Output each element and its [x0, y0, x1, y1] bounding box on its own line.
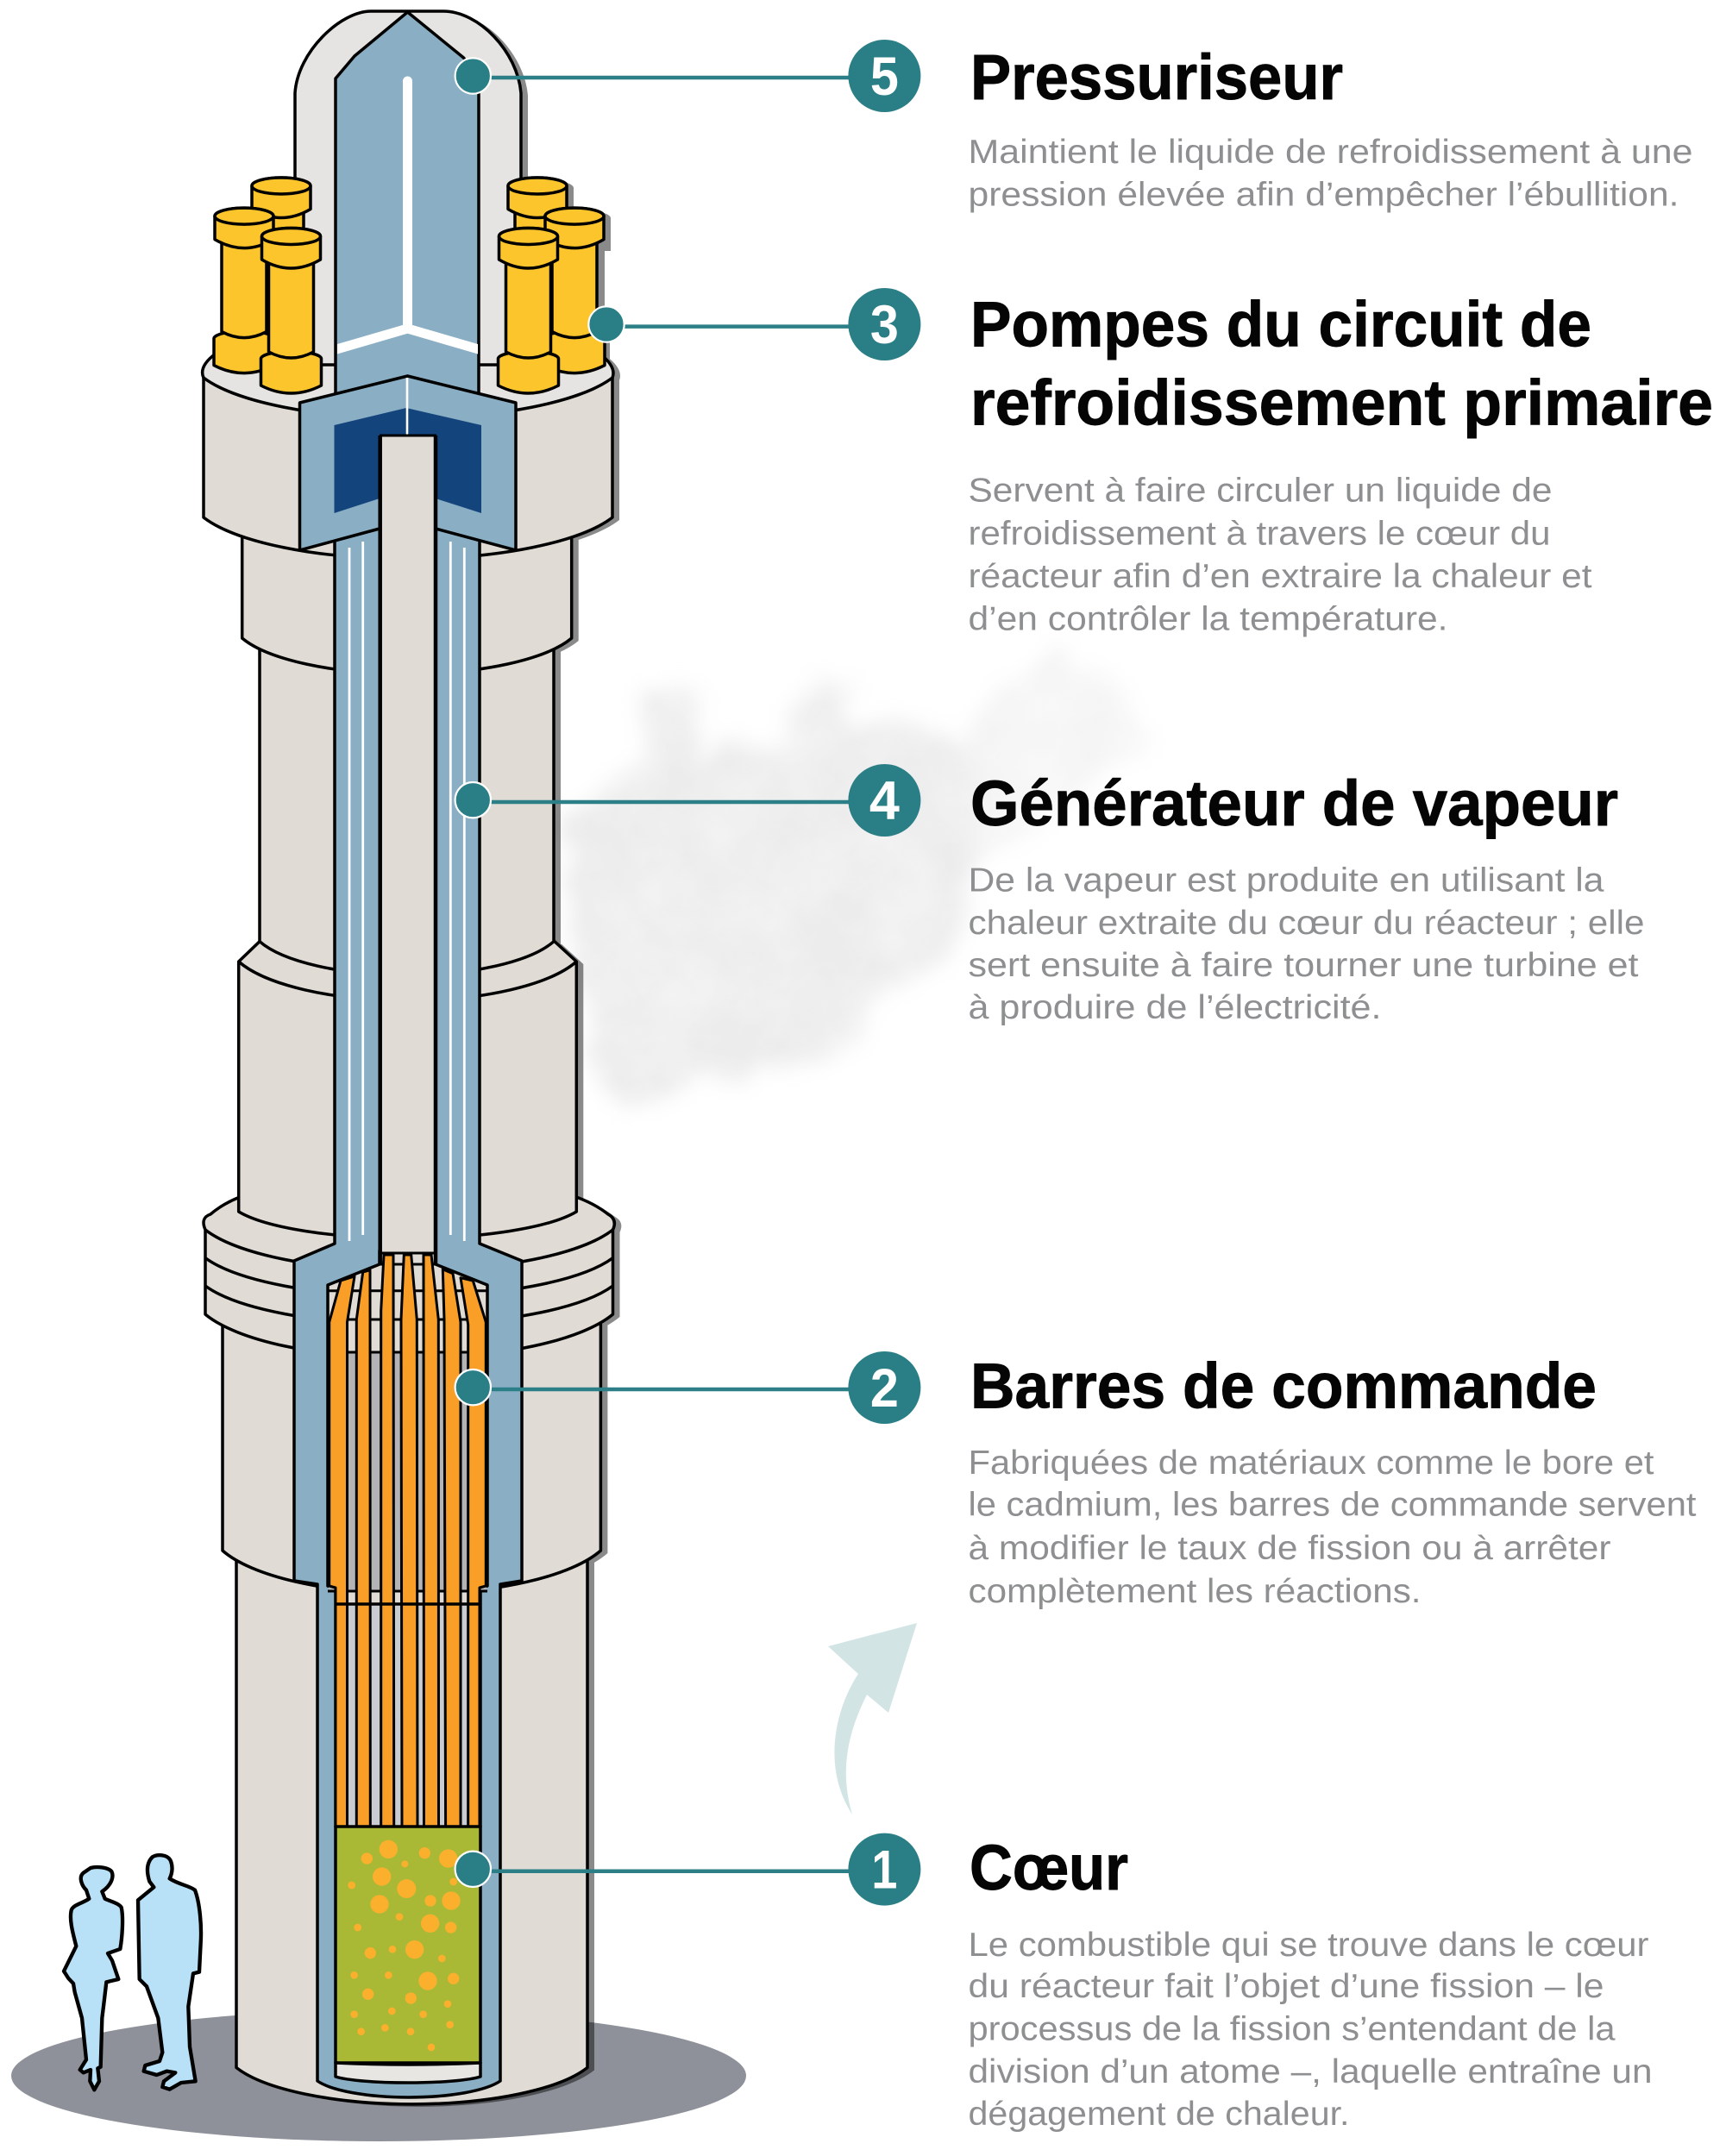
- steam cloud: [565, 647, 1139, 1117]
- pump: right: [544, 208, 605, 373]
- chamber divider: [336, 1602, 480, 1606]
- description: coeur: [968, 1927, 1653, 2133]
- description: generateur: sert ensuite à faire tourner une turbine et: [968, 947, 1639, 984]
- description: coeur: Le combustible qui se trouve dans le cœur: [968, 1927, 1649, 1964]
- description: coeur: processus de la fission s’entendant de la: [968, 2011, 1616, 2047]
- number badge 2: [848, 1351, 920, 1424]
- heading: coeur: Cœur: [970, 1832, 1128, 1903]
- description: barres: complètement les réactions.: [968, 1573, 1422, 1610]
- description: pressuriseur: Maintient le liquide de refroidissement à une: [968, 134, 1692, 171]
- number badge 5: 5: [870, 47, 899, 107]
- leader line 3: [621, 324, 850, 329]
- description: barres: Fabriquées de matériaux comme le bore et: [968, 1445, 1654, 1482]
- fuel core: [336, 1827, 480, 2083]
- silhouette: woman: [64, 1867, 122, 2090]
- number badge 4: 4: [869, 771, 900, 831]
- description: barres: à modifier le taux de fission ou à arrêter: [968, 1530, 1611, 1567]
- steam generator shaft: [260, 630, 554, 975]
- ground shadow ellipse: [11, 2010, 746, 2141]
- description: pressuriseur: pression élevée afin d’empêcher l’ébullition.: [968, 176, 1679, 214]
- figures: two people for scale: [64, 1855, 201, 2090]
- marker dot 5: [455, 58, 491, 94]
- tower base cylinder: [236, 1552, 587, 2104]
- reactor tower: [203, 11, 614, 2104]
- number badge 1: 1: [871, 1840, 897, 1901]
- description: pressuriseur: [968, 134, 1692, 214]
- panel: pompes: [848, 288, 1713, 638]
- lower interstitial fill: [336, 1605, 480, 1827]
- curved arrow: [828, 1623, 917, 1814]
- steam tube lines: [349, 542, 464, 1241]
- heading: pressuriseur: Pressuriseur: [970, 41, 1343, 113]
- panel: barres de commande: [848, 1350, 1697, 1610]
- central column: [380, 436, 436, 1264]
- number badge 4: [848, 764, 920, 837]
- steam generator lower section: [239, 942, 576, 1238]
- cutaway head: [300, 376, 516, 550]
- heading: pompes: [970, 288, 1713, 438]
- pump: back right: [507, 178, 568, 343]
- leader line 2: [487, 1388, 850, 1391]
- leader line 1: [487, 1869, 850, 1873]
- leader line 5: [487, 76, 850, 79]
- description: coeur: du réacteur fait l’objet d’une fission – le: [968, 1968, 1604, 2005]
- banded flange: [204, 1197, 614, 1358]
- tower drop shadow: [210, 14, 621, 2107]
- control rod chamber: [328, 1250, 487, 1827]
- heading: pompes: Pompes du circuit de: [970, 288, 1591, 360]
- number badge 3: 3: [870, 295, 899, 355]
- coolant wall section: [294, 526, 522, 2097]
- description: generateur: De la vapeur est produite en utilisant la: [968, 862, 1604, 899]
- description: pompes: refroidissement à travers le cœur du: [968, 516, 1551, 553]
- pump: left: [214, 208, 274, 373]
- fission bubbles: [348, 1840, 461, 2051]
- pump: front right: [499, 228, 559, 393]
- grey interstitial fill: [329, 1352, 486, 1591]
- pump: back left: [251, 178, 311, 343]
- number badge 3: [848, 288, 920, 360]
- panel: generateur: [848, 764, 1644, 1026]
- description: coeur: division d’un atome –, laquelle entraîne un: [968, 2053, 1653, 2090]
- panel: pressuriseur: [848, 40, 1692, 214]
- number badge 1: [848, 1833, 920, 1906]
- heading: pompes: refroidissement primaire: [970, 367, 1713, 438]
- description: generateur: à produire de l’électricité.: [968, 989, 1382, 1026]
- heading: generateur: Générateur de vapeur: [970, 768, 1618, 839]
- description: generateur: [968, 862, 1644, 1026]
- leader line 4: [487, 800, 850, 804]
- description: coeur: dégagement de chaleur.: [968, 2096, 1349, 2133]
- description: barres: [968, 1445, 1697, 1610]
- description: generateur: chaleur extraite du cœur du réacteur ; elle: [968, 905, 1644, 942]
- heading: barres: Barres de commande: [970, 1350, 1597, 1421]
- number badge 5: [848, 40, 920, 112]
- pump: front left: [260, 228, 321, 393]
- description: barres: le cadmium, les barres de commande servent: [968, 1487, 1697, 1523]
- marker dot 4: [455, 782, 491, 818]
- chamber cross lines: [328, 1264, 487, 1591]
- top flange: [204, 378, 612, 559]
- lower vessel cylinder: [223, 1319, 600, 1594]
- panel: coeur: [848, 1832, 1653, 2133]
- marker dot 3: [588, 306, 624, 342]
- description: pompes: [968, 473, 1592, 638]
- number badge 2: 2: [870, 1358, 899, 1419]
- description: pompes: d’en contrôler la température.: [968, 600, 1447, 638]
- description: pompes: réacteur afin d’en extraire la chaleur et: [968, 558, 1592, 595]
- silhouette: man: [138, 1855, 201, 2090]
- upper collar: [242, 517, 572, 674]
- platform top: [203, 354, 613, 418]
- pressuriser dome: [295, 11, 521, 397]
- control rods: [330, 1255, 486, 1827]
- marker dot 1: [455, 1852, 491, 1887]
- marker dot 2: [455, 1369, 491, 1405]
- description: pompes: Servent à faire circuler un liquide de: [968, 473, 1553, 510]
